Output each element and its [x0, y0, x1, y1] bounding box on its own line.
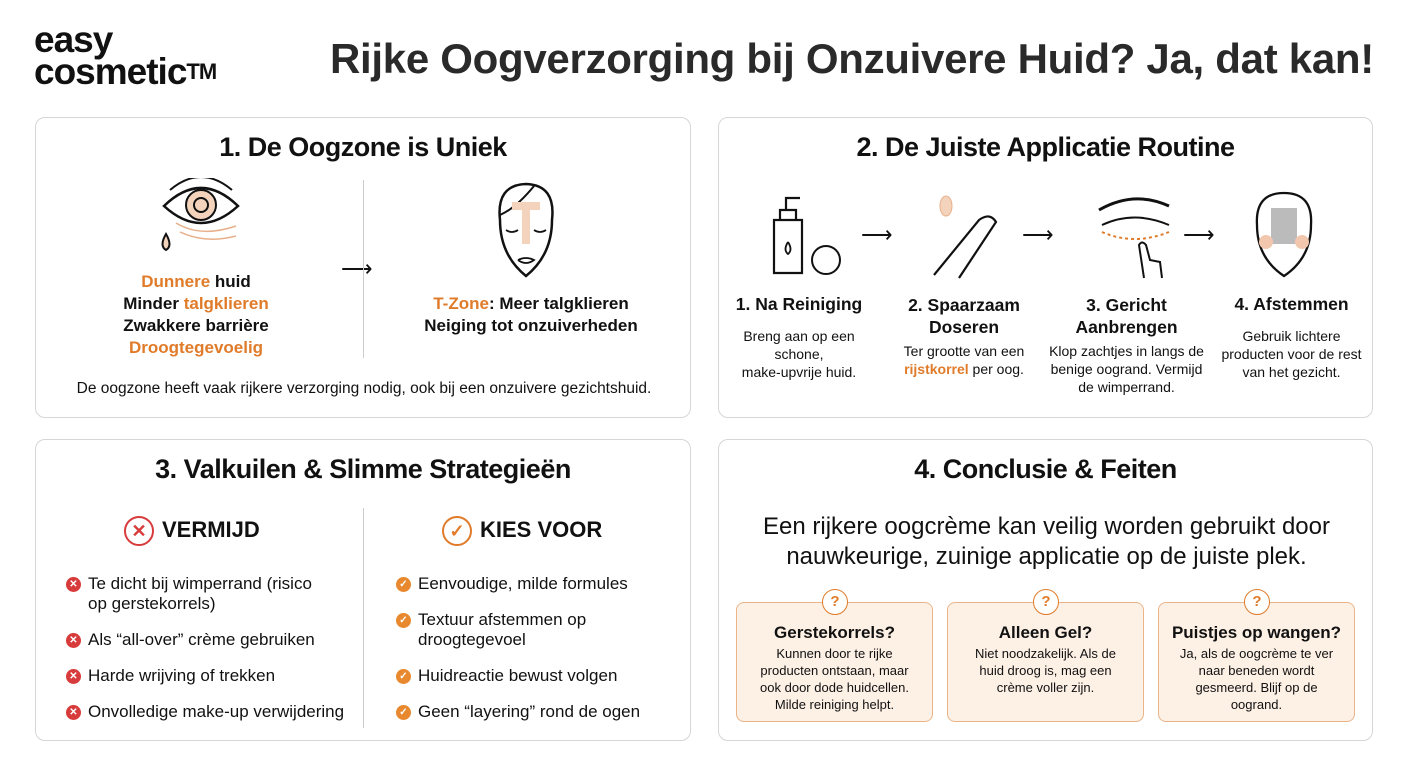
- step texts: [736, 294, 862, 380]
- text: t-zone: [424, 294, 638, 335]
- card: gel: [947, 602, 1144, 722]
- card: puistjes: [1158, 602, 1355, 722]
- step texts: make-upvrije huid.: [742, 364, 856, 380]
- panel: 3 valkuilen: Als “all-over” crème gebruiken: [88, 630, 315, 649]
- panel: 2 routine: Klop zachtjes in langs de benige oogrand. Vermijd de wimperrand.: [1049, 343, 1204, 395]
- text: eye traits: Zwakkere barrière: [123, 316, 269, 335]
- card: puistjes: Puistjes op wangen?: [1172, 623, 1341, 642]
- icon: face 2: [1256, 192, 1312, 278]
- icon: bottle: [772, 196, 841, 275]
- conclusion text: Een rijkere oogcrème kan veilig worden gebruikt door: [763, 513, 1330, 540]
- conclusion text: nauwkeurige, zuinige applicatie op de juiste plek.: [786, 543, 1307, 570]
- heading 3: 3. Valkuilen & Slimme Strategieën: [155, 454, 571, 484]
- panel: 3 valkuilen: Te dicht bij wimperrand (risico: [88, 574, 312, 593]
- card: gel: Niet noodzakelijk. Als de huid droog is, mag een crème voller zijn.: [975, 646, 1116, 695]
- step texts: 1. Na Reiniging: [736, 294, 862, 314]
- panel: 4 conclusie: [718, 439, 1373, 741]
- panel: 2 routine: 3. Gericht: [1086, 295, 1167, 315]
- panel: 3 valkuilen: ✓: [399, 579, 408, 590]
- kies list: [396, 574, 640, 721]
- panel: 3 valkuilen: Onvolledige make-up verwijdering: [88, 702, 344, 721]
- arrow: ⟶: [341, 256, 373, 281]
- arrow: ⟶: [861, 222, 893, 247]
- icon: eye: [162, 178, 240, 252]
- arrow: ⟶: [1183, 222, 1215, 247]
- panel: 2 routine: 2. Spaarzaam: [908, 295, 1020, 315]
- panel: 4 conclusie: ?: [1252, 593, 1262, 610]
- logo: cosmeticTM: [34, 51, 216, 92]
- panel: 3 valkuilen: Harde wrijving of trekken: [88, 666, 275, 685]
- text: eye traits: Minder talgklieren: [123, 294, 269, 313]
- panel: 3 valkuilen: Textuur afstemmen op: [418, 610, 586, 629]
- panel: 2 routine: Aanbrengen: [1075, 317, 1178, 337]
- logo: [34, 19, 216, 92]
- step texts: Breng aan op een schone,: [743, 328, 855, 362]
- footer text 1: De oogzone heeft vaak rijkere verzorging nodig, ook bij een onzuivere gezichtshuid.: [77, 380, 651, 397]
- text: t-zone: T-Zone: Meer talgklieren: [433, 294, 629, 313]
- panel: 3 valkuilen: op gerstekorrels): [88, 594, 216, 613]
- icon: finger: [933, 196, 998, 279]
- panel: 3 valkuilen: ✓: [399, 707, 408, 718]
- panel: 2 routine: [718, 117, 1373, 418]
- panel: 3 valkuilen: ✕: [69, 635, 78, 646]
- card: puistjes: Ja, als de oogcrème te ver naar beneden wordt gesmeerd. Blijf op de oogrand.: [1180, 646, 1333, 712]
- icon: eye application: [1098, 197, 1170, 278]
- vermijd header: ✕: [131, 521, 147, 541]
- panel: 3 valkuilen: [35, 439, 691, 741]
- vermijd header: [124, 516, 260, 546]
- card: gerstekorrels: Kunnen door te rijke producten ontstaan, maar ook door dode huidcellen. Milde reiniging helpt.: [760, 646, 909, 712]
- panel: 2 routine: 4. Afstemmen: [1234, 294, 1349, 314]
- text: t-zone: Neiging tot onzuiverheden: [424, 316, 638, 335]
- panel: 3 valkuilen: Huidreactie bewust volgen: [418, 666, 617, 685]
- panel: 3 valkuilen: ✕: [69, 579, 78, 590]
- card: gerstekorrels: Gerstekorrels?: [774, 623, 895, 642]
- vermijd header: VERMIJD: [162, 517, 260, 542]
- panel: 2 routine: Ter grootte van een rijstkorrel per oog.: [904, 343, 1024, 377]
- icon: face: [498, 182, 554, 278]
- panel: 3 valkuilen: ✓: [399, 671, 408, 682]
- text: eye traits: Dunnere huid: [141, 272, 251, 291]
- title: Rijke Oogverzorging bij Onzuivere Huid? Ja, dat kan!: [330, 35, 1374, 82]
- panel: 2 routine: Gebruik lichtere producten voor de rest van het gezicht.: [1221, 328, 1362, 380]
- logo: easy: [34, 19, 112, 60]
- card: gerstekorrels: [736, 602, 933, 722]
- panel: 4 conclusie: ?: [1041, 593, 1051, 610]
- kies voor header: [442, 516, 602, 546]
- panel: 1 oogzone: [35, 117, 691, 418]
- kies voor header: KIES VOOR: [480, 517, 602, 542]
- panel: 2 routine: Doseren: [929, 317, 999, 337]
- heading 1: 1. De Oogzone is Uniek: [219, 132, 507, 162]
- panel: 3 valkuilen: ✕: [69, 707, 78, 718]
- panel: 3 valkuilen: ✓: [399, 615, 408, 626]
- panel: 4 conclusie: ?: [830, 593, 840, 610]
- text: eye traits: [123, 272, 269, 357]
- heading 4: 4. Conclusie & Feiten: [914, 454, 1177, 484]
- panel: 3 valkuilen: Geen “layering” rond de ogen: [418, 702, 640, 721]
- conclusion text: [763, 513, 1330, 570]
- panel: 3 valkuilen: ✕: [69, 671, 78, 682]
- kies voor header: ✓: [449, 521, 465, 541]
- text: eye traits: Droogtegevoelig: [129, 338, 263, 357]
- heading 2: 2. De Juiste Applicatie Routine: [856, 132, 1235, 162]
- panel: 3 valkuilen: Eenvoudige, milde formules: [418, 574, 628, 593]
- arrow: ⟶: [1022, 222, 1054, 247]
- panel: 3 valkuilen: droogtegevoel: [418, 630, 526, 649]
- card: gel: Alleen Gel?: [999, 623, 1092, 642]
- vermijd list: [66, 574, 344, 721]
